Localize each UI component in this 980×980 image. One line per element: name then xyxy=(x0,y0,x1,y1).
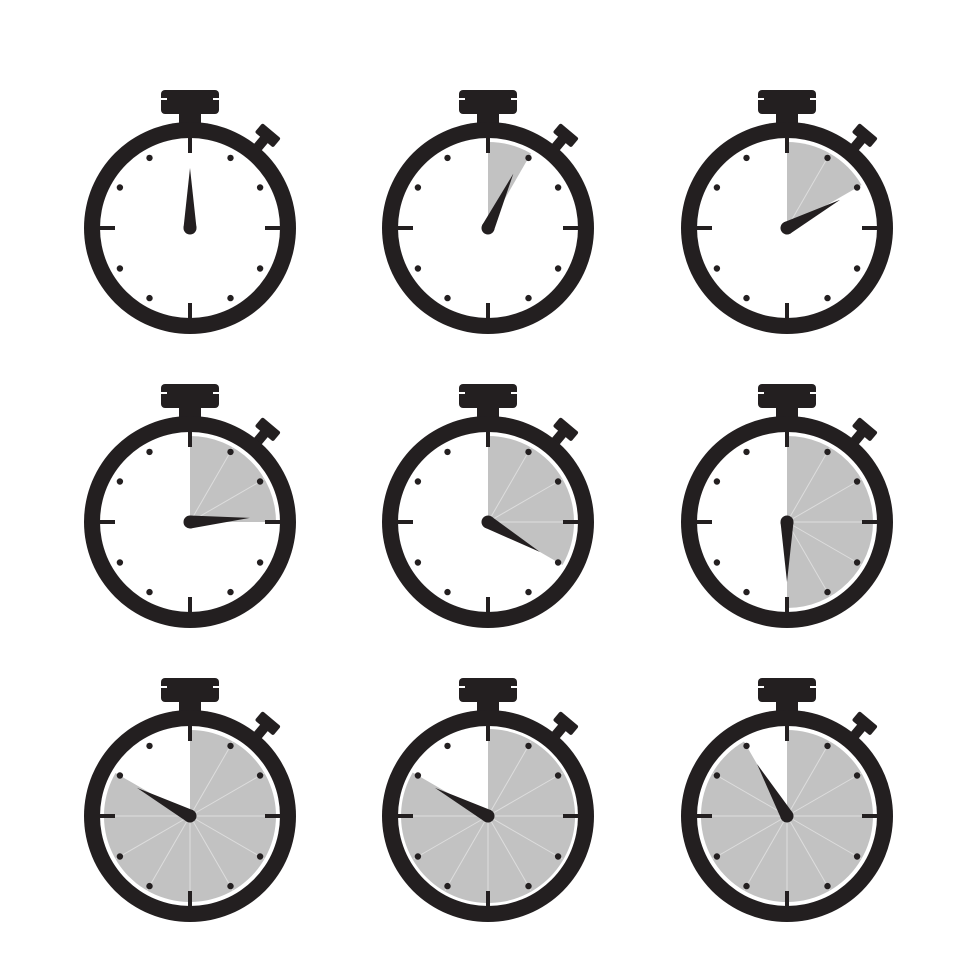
stopwatch 4: 3/12 xyxy=(84,384,296,628)
stopwatch 5: 4/12 xyxy=(382,384,594,628)
stopwatch 1: 0 xyxy=(84,90,296,334)
stopwatch 6: 6/12 xyxy=(681,384,893,628)
stopwatch 3: 2/12 xyxy=(681,90,893,334)
stopwatch 7: 10/12 xyxy=(84,678,296,922)
stopwatch 8: 10/12 xyxy=(382,678,594,922)
stopwatch 9: 11/12 xyxy=(681,678,893,922)
stopwatch 2: 1/12 xyxy=(382,90,594,334)
